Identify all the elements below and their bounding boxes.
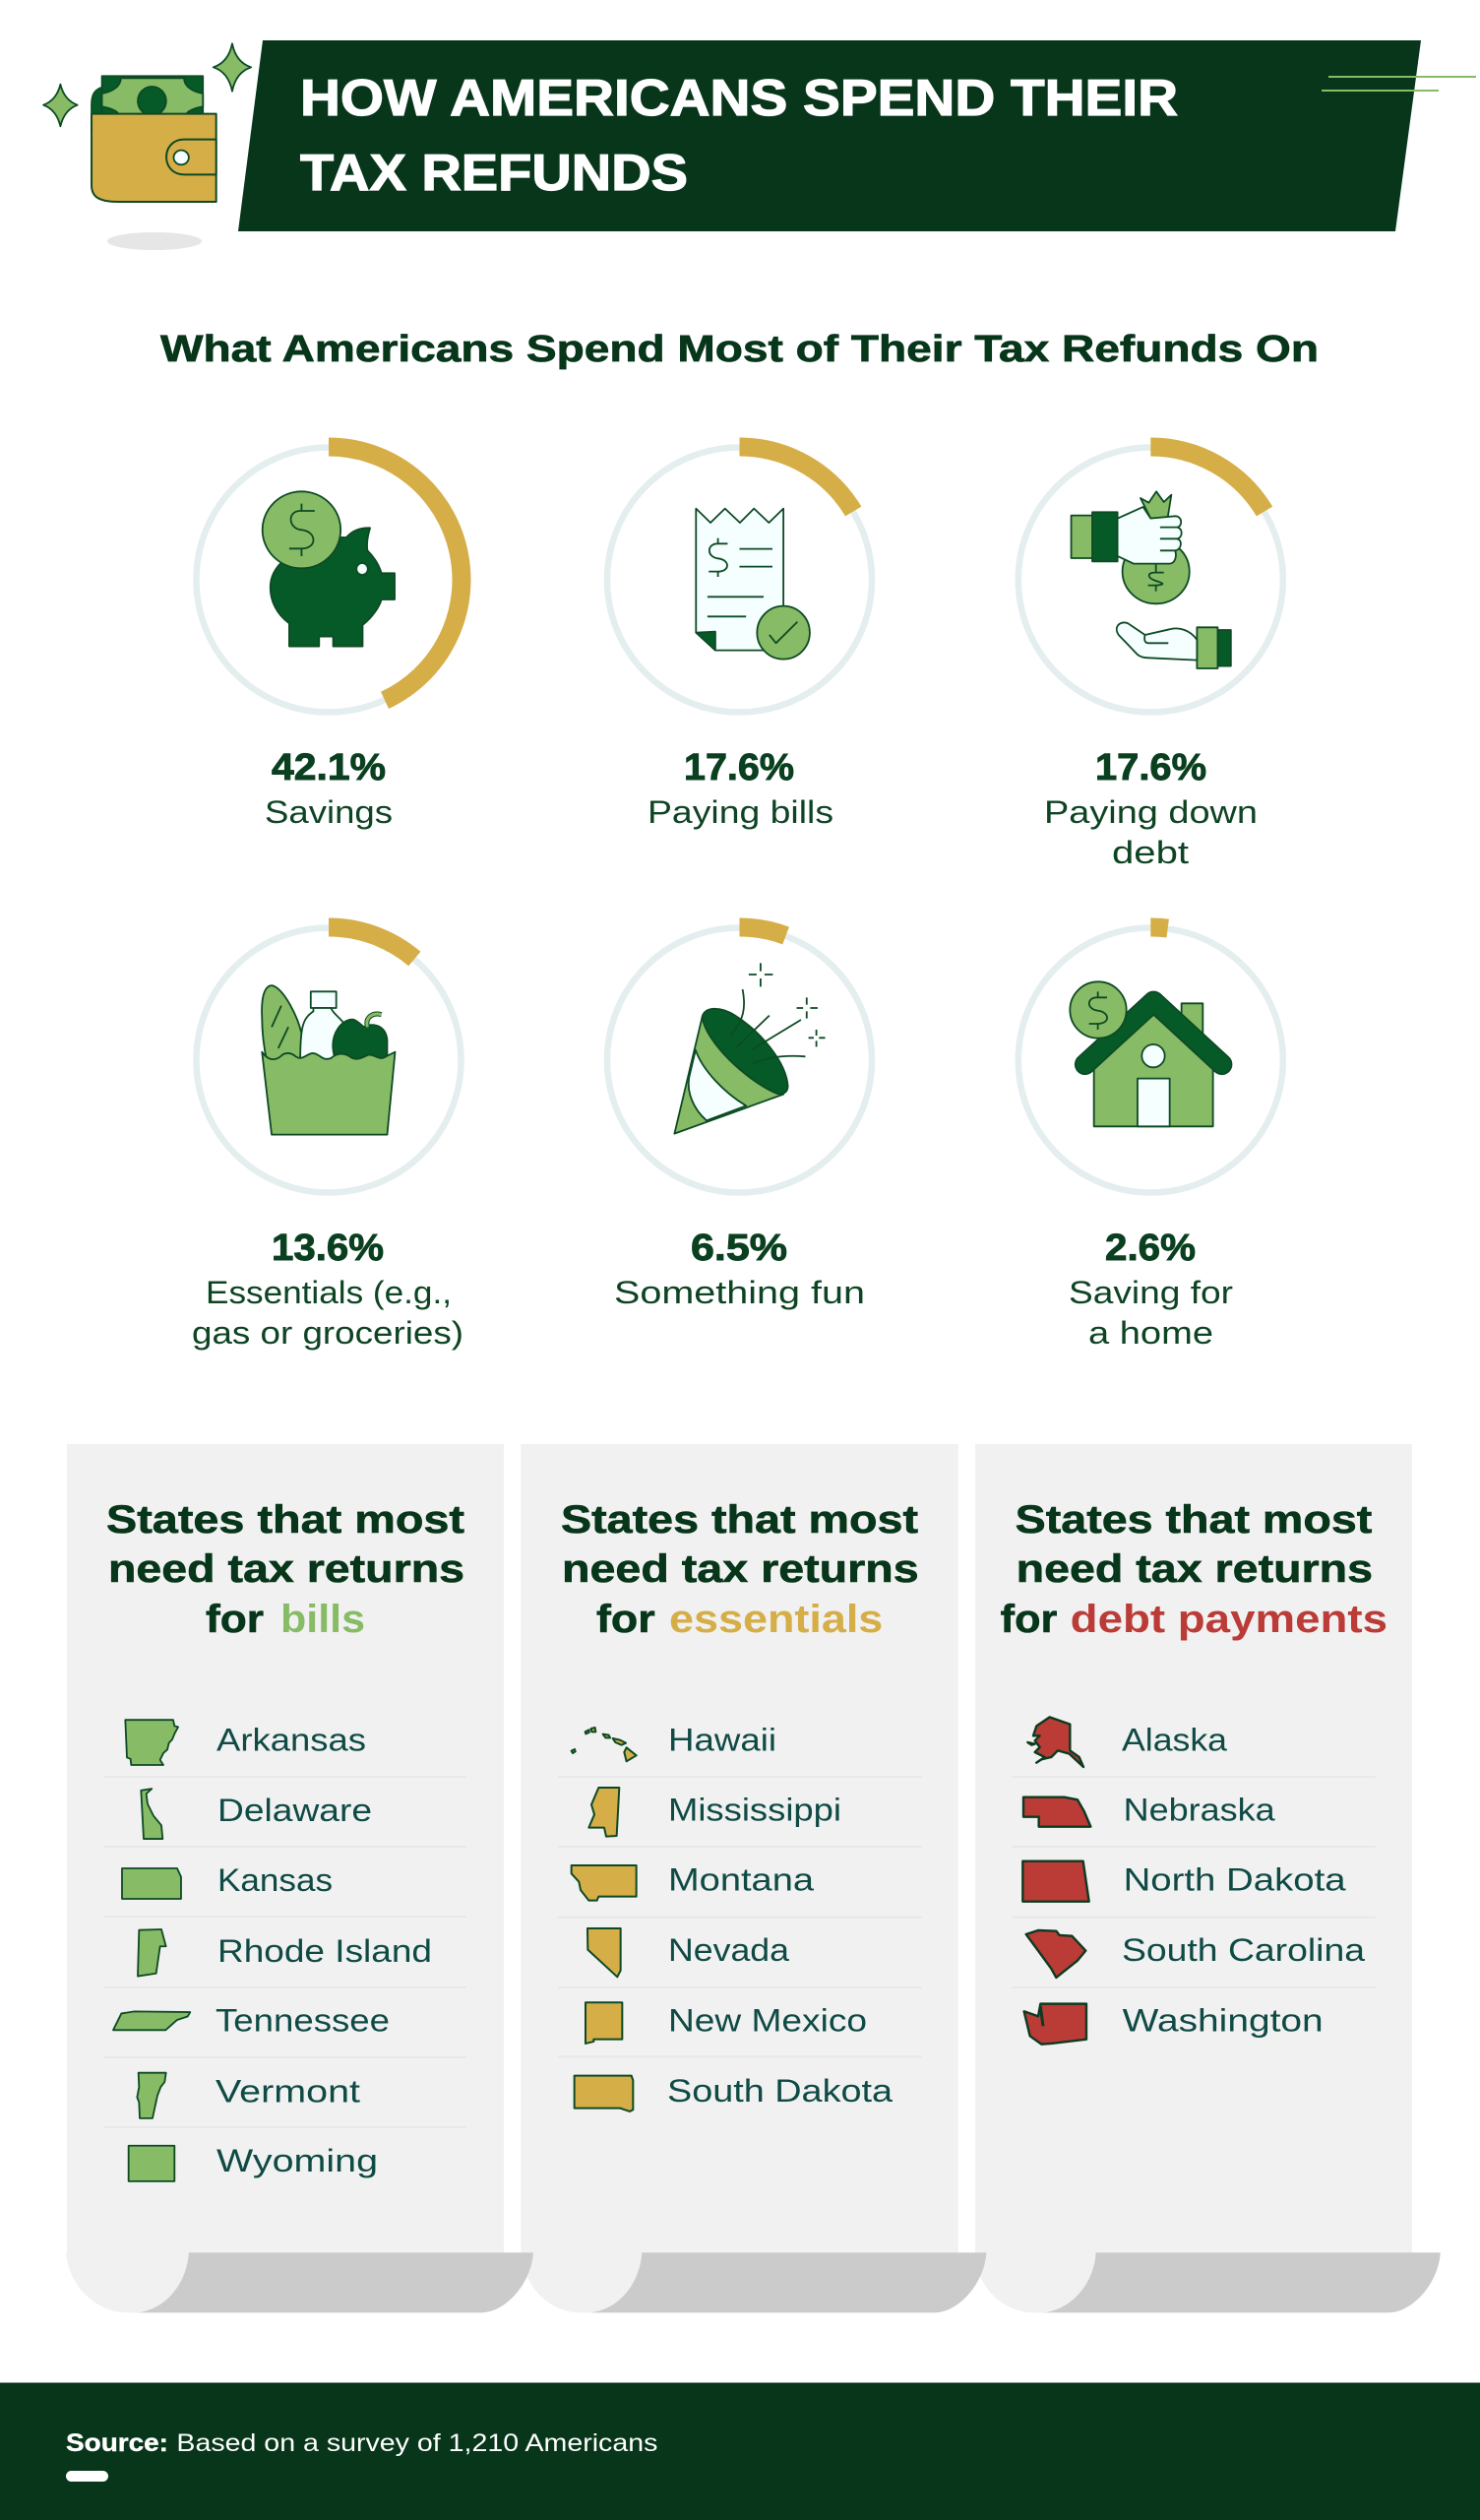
value: 17.6% [1095,747,1206,788]
state names: North Dakota [1124,1862,1346,1898]
scroll panels background [66,1444,1441,2312]
value: 42.1% [272,747,386,788]
label [192,1275,463,1351]
state names: New Mexico [668,2003,867,2039]
source text: Based on a survey of 1,210 Americans [176,2429,657,2457]
icon: wallet with cash [92,76,216,202]
value: 2.6% [1105,1228,1196,1269]
state names: Rhode Island [217,1933,432,1969]
source pill [66,2471,108,2482]
panel: savings 42.1% [197,447,462,830]
icon: party popper [674,963,826,1134]
label: Saving for [1069,1275,1233,1310]
state names: Vermont [216,2073,360,2109]
state names: Montana [668,1862,814,1898]
source text: Source: [66,2429,168,2457]
heading [561,1498,919,1641]
label [1069,1275,1233,1351]
heading: for [596,1598,655,1641]
heading: need tax returns [562,1547,919,1591]
title [300,70,1178,202]
heading: for [206,1598,264,1641]
label: debt [1112,835,1189,870]
icon: house with coin [1070,981,1222,1126]
title banner [238,40,1476,231]
value: 17.6% [684,747,794,788]
state names: Kansas [217,1862,333,1898]
section heading: What Americans Spend Most of Their Tax Refunds On [160,329,1319,370]
heading: debt payments [1071,1598,1388,1641]
value: 13.6% [272,1228,384,1269]
panel: something fun 6.5% [607,927,872,1310]
icon: sparkles [43,43,251,126]
label: Paying down [1044,794,1258,830]
state names: South Carolina [1122,1932,1365,1968]
panel: paying bills 17.6% [607,447,872,830]
value: 6.5% [691,1228,787,1269]
label: Something fun [614,1275,865,1310]
panel: states for bills [103,1498,466,2181]
state names: Mississippi [668,1792,841,1827]
heading: for [1001,1598,1057,1641]
label: a home [1088,1315,1213,1351]
state names: Alaska [1122,1723,1227,1758]
icon: hands exchanging money bag [1072,491,1231,668]
label: Essentials (e.g., [206,1275,452,1310]
footer bar [0,2382,1480,2520]
label: Savings [265,794,393,830]
icons: red state maps [1022,1717,1090,2045]
state names: Nebraska [1124,1792,1275,1827]
state names: Arkansas [216,1723,366,1758]
heading [106,1498,464,1641]
state names: South Dakota [667,2073,893,2109]
state names: Delaware [217,1793,372,1828]
heading: need tax returns [1017,1547,1373,1591]
label: Paying bills [648,794,833,830]
heading [1001,1498,1388,1641]
state names [667,1723,893,2109]
state names [1122,1723,1365,2039]
state names: Nevada [668,1932,789,1968]
icon: receipt with check [696,509,810,660]
state names: Wyoming [216,2143,378,2178]
icons: gold state maps [572,1728,637,2111]
title: TAX REFUNDS [300,145,688,202]
panel: essentials 13.6% [192,927,463,1351]
heading: States that most [106,1498,464,1542]
state names: Hawaii [668,1723,776,1758]
heading: need tax returns [108,1547,464,1591]
heading: States that most [1016,1498,1372,1542]
heading: essentials [669,1598,883,1641]
state names [216,1723,432,2178]
panel: saving for a home 2.6% [1018,927,1283,1351]
state names: Tennessee [216,2002,390,2038]
title: HOW AMERICANS SPEND THEIR [300,70,1178,127]
wallet shadow [107,232,202,250]
icon: grocery bag [262,985,396,1135]
panel: states for debt payments [1001,1498,1388,2045]
heading: States that most [561,1498,918,1542]
panel: paying down debt 17.6% [1018,447,1283,870]
panel: states for essentials [558,1498,922,2111]
icons: green state maps [113,1720,190,2181]
label [1044,794,1258,870]
state names: Washington [1123,2003,1324,2039]
label: gas or groceries) [192,1315,463,1351]
icon: piggy bank [263,491,395,647]
heading: bills [280,1598,365,1641]
